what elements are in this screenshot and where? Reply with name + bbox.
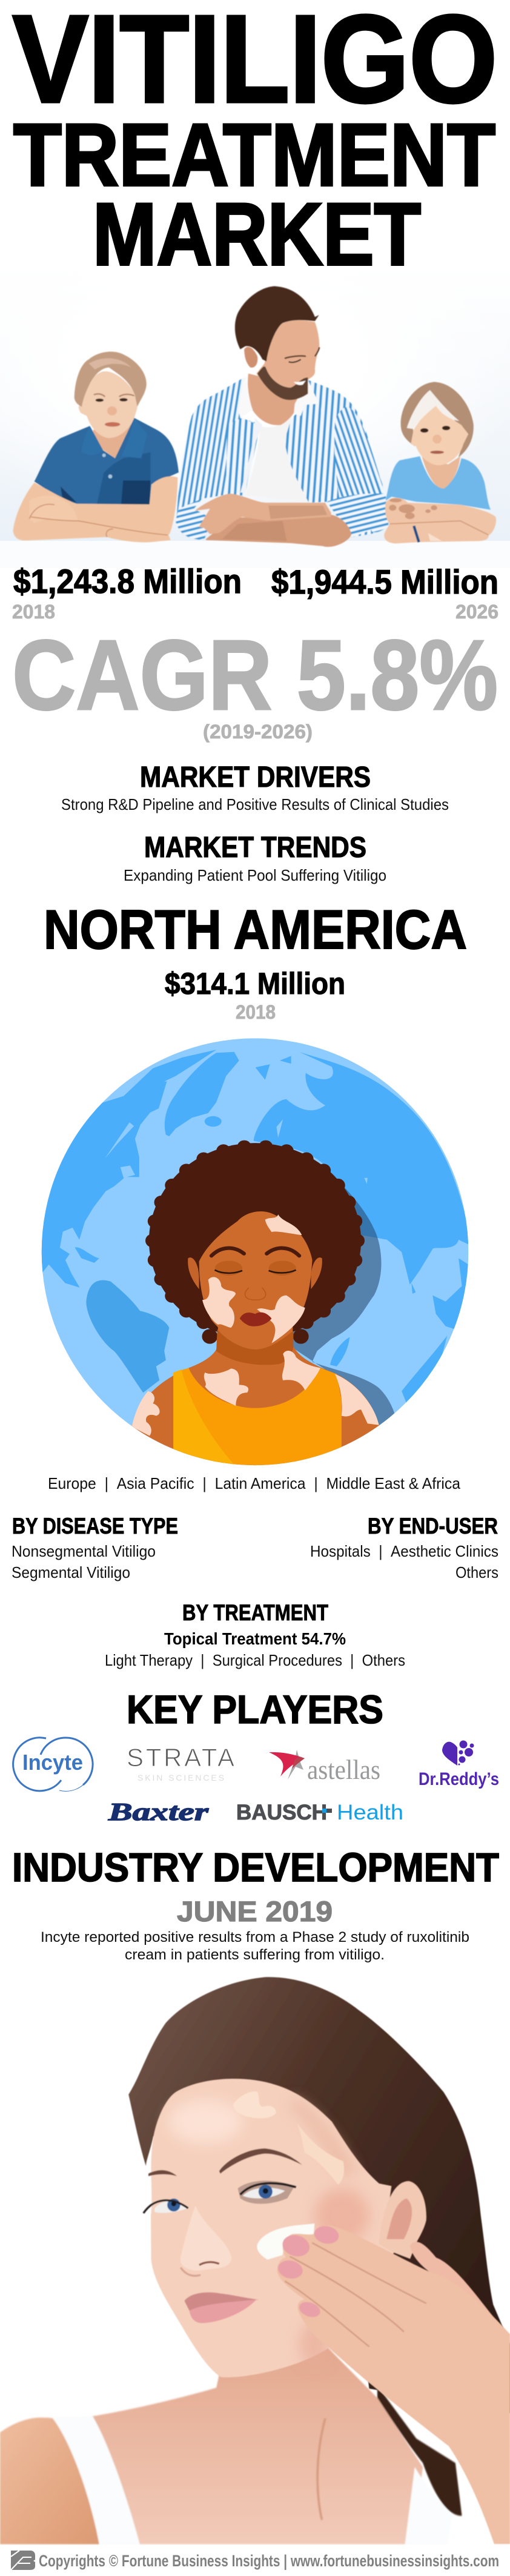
stat: 2018 market size: $1,243.8 Million xyxy=(13,562,242,600)
segment: by disease type: Nonsegmental Vitiligo xyxy=(12,1542,156,1560)
segment: by treatment xyxy=(105,1600,405,1669)
logo: STRATA Skin Sciences: STRATA xyxy=(127,1743,234,1772)
market drivers xyxy=(61,761,449,813)
title xyxy=(13,0,497,283)
north america heading: 2018 xyxy=(236,1001,276,1023)
cream xyxy=(257,2223,314,2260)
north america heading: $314.1 Million xyxy=(165,967,345,1001)
face xyxy=(151,2079,394,2377)
nose xyxy=(180,2206,231,2271)
stat: 2026 market size: 2026 xyxy=(455,601,498,623)
logo: Incyte xyxy=(13,1738,93,1791)
north america heading: NORTH AMERICA xyxy=(44,899,467,961)
left boy xyxy=(13,352,179,542)
hair xyxy=(145,1141,365,1344)
neck shadow xyxy=(216,1329,293,1365)
facial features xyxy=(215,1260,242,1276)
logo: Astellas: astellas xyxy=(307,1755,380,1785)
logo: Baxter: Baxter xyxy=(108,1798,209,1826)
segment: by end-user: Others xyxy=(455,1563,498,1581)
tank top xyxy=(173,1368,342,1468)
face xyxy=(199,1211,313,1328)
lower hair and body xyxy=(0,2345,462,2545)
logo: Dr. Reddy's xyxy=(419,1741,499,1789)
segment: by end-user xyxy=(310,1514,498,1581)
icon: Fortune Business Insights logo xyxy=(11,2551,35,2570)
logo: Dr. Reddy's: Dr.Reddy’s xyxy=(419,1769,499,1789)
other regions list: Europe | Asia Pacific | Latin America | Middle East & Africa xyxy=(48,1474,461,1492)
hand xyxy=(277,2225,510,2544)
CAGR headline: (2019-2026) xyxy=(203,721,313,743)
logo: Bausch Health xyxy=(236,1801,403,1824)
nails xyxy=(276,2224,340,2320)
right boy xyxy=(384,382,496,543)
development description xyxy=(41,1929,469,1963)
date: JUNE 2019 xyxy=(177,1895,333,1927)
Hudson Bay and lakes xyxy=(105,1119,368,1184)
brows xyxy=(148,2148,302,2176)
title: MARKET xyxy=(93,185,421,283)
market drivers: MARKET DRIVERS xyxy=(140,761,371,793)
stat: 2018 market size: 2018 xyxy=(12,601,55,623)
key players heading: KEY PLAYERS xyxy=(127,1687,383,1732)
segment: by treatment: Light Therapy | Surgical Procedures | Others xyxy=(105,1651,405,1669)
shoulders and neck xyxy=(131,1326,379,1468)
north america heading xyxy=(44,899,467,1023)
hair xyxy=(128,1977,510,2413)
market trends xyxy=(124,832,386,884)
photo: woman applying cream xyxy=(0,1977,510,2545)
market trends: MARKET TRENDS xyxy=(144,832,366,864)
eyes xyxy=(237,2180,295,2204)
face and hand xyxy=(144,2079,510,2544)
logo: Bausch Health: Health xyxy=(337,1801,403,1824)
ears xyxy=(188,1257,322,1289)
ear xyxy=(379,2181,426,2259)
father xyxy=(176,286,389,547)
logo: Incyte: Incyte xyxy=(22,1750,83,1775)
facial shading xyxy=(168,2097,369,2366)
illustration: globe with woman with vitiligo xyxy=(39,1038,472,1468)
logo: STRATA Skin Sciences: SKIN SCIENCES xyxy=(137,1773,224,1783)
photo: father and two sons at a table xyxy=(0,267,510,568)
continents xyxy=(39,1050,472,1403)
segment: by treatment: Topical Treatment 54.7% xyxy=(164,1629,346,1648)
segment: by disease type: Segmental Vitiligo xyxy=(12,1563,130,1581)
stat: 2018 market size xyxy=(12,562,242,623)
market trends: Expanding Patient Pool Suffering Vitiligo xyxy=(124,866,386,884)
development description: cream in patients suffering from vitiligo. xyxy=(125,1947,385,1963)
lips xyxy=(184,2293,259,2311)
segment: by end-user: Hospitals | Aesthetic Clinics xyxy=(310,1542,498,1560)
vitiligo patches xyxy=(233,2091,276,2118)
market drivers: Strong R&D Pipeline and Positive Results of Clinical Studies xyxy=(61,795,449,813)
segment: by treatment: BY TREATMENT xyxy=(182,1600,328,1625)
vitiligo patches xyxy=(131,1214,379,1436)
logo: Astellas xyxy=(269,1750,380,1785)
cast shadow xyxy=(293,1178,395,1426)
stat: 2026 market size xyxy=(271,563,498,623)
segment: by disease type: BY DISEASE TYPE xyxy=(12,1514,178,1538)
development description: Incyte reported positive results from a Phase 2 study of ruxolitinib xyxy=(41,1929,469,1945)
segment: by disease type xyxy=(12,1514,178,1581)
logo: Bausch Health: BAUSCH xyxy=(236,1801,327,1824)
raised finger xyxy=(410,2242,495,2319)
